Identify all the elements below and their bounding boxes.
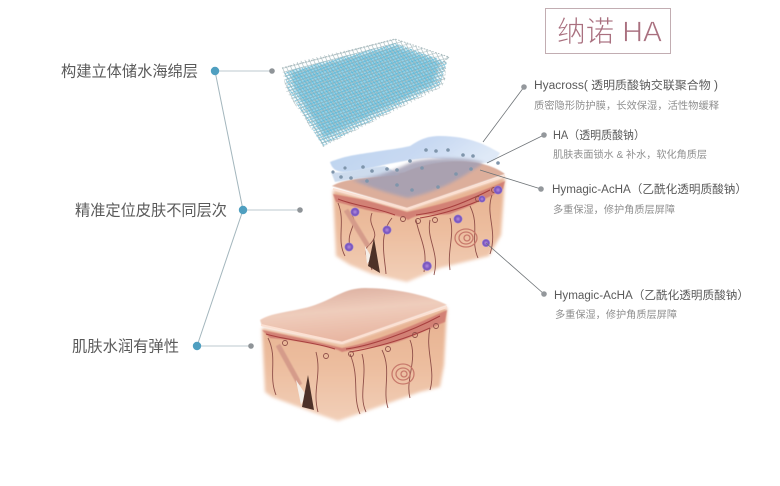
callout: Hyacross: 质密隐形防护膜，长效保湿，活性物缓释 [534, 99, 719, 112]
lower block top surface [260, 288, 447, 342]
skin block body [333, 177, 505, 282]
skin top surface [332, 161, 505, 208]
callout: HA [553, 128, 707, 161]
left label: elastic skin: 肌肤水润有弹性 [72, 338, 179, 356]
callout: Hyacross: Hyacross( 透明质酸钠交联聚合物 ) [534, 78, 718, 92]
HA molecules [331, 148, 500, 192]
callout: HA: HA（透明质酸钠） [553, 128, 645, 142]
title box: 纳诺 HA [557, 16, 663, 48]
lower film strip [331, 166, 400, 182]
left label: skin layers: 精准定位皮肤不同层次 [75, 202, 227, 220]
dermis strands [338, 190, 490, 218]
lower block body [262, 307, 447, 421]
lower dermis band [262, 310, 447, 352]
callout: Hymagic-AcHA lower [554, 288, 749, 321]
lower dermis strands [266, 316, 440, 352]
lower blood vessels [268, 324, 438, 414]
purple Hymagic molecules [344, 186, 502, 271]
left connector lines and nodes [193, 67, 303, 350]
title box [546, 8, 670, 54]
grey blue hydration layer [352, 158, 484, 198]
upper skin block with hyaluronic layers [330, 136, 505, 282]
lower skin highlight [261, 307, 447, 343]
hair wedge [368, 238, 380, 273]
right callout lines [480, 84, 547, 297]
left label: sponge layer: 构建立体储水海绵层 [61, 64, 198, 80]
callout: HA: 肌肤表面锁水 & 补水，软化角质层 [553, 148, 707, 161]
skin surface highlight [333, 176, 505, 209]
lower hair follicle [278, 345, 300, 385]
lower sweat gland coil [392, 364, 414, 384]
callout: Hymagic-AcHA upper: 多重保湿，修护角质层屏障 [553, 203, 675, 216]
blue film layer [330, 136, 500, 172]
callout: Hymagic-AcHA lower: 多重保湿，修护角质层屏障 [555, 308, 677, 321]
hair follicle [346, 210, 368, 246]
callout: Hyacross [534, 78, 719, 112]
dermis band [333, 181, 505, 220]
lower skin block [260, 288, 447, 421]
blood vessels [338, 188, 496, 275]
mesh sponge illustration [282, 39, 449, 147]
callout: Hymagic-AcHA upper [552, 182, 747, 216]
callout: Hymagic-AcHA lower: Hymagic-AcHA（乙酰化透明质酸钠） [554, 288, 749, 302]
callout: Hymagic-AcHA upper: Hymagic-AcHA（乙酰化透明质酸钠） [552, 182, 747, 196]
sweat gland coil [455, 229, 477, 247]
lower hair wedge [302, 375, 314, 410]
